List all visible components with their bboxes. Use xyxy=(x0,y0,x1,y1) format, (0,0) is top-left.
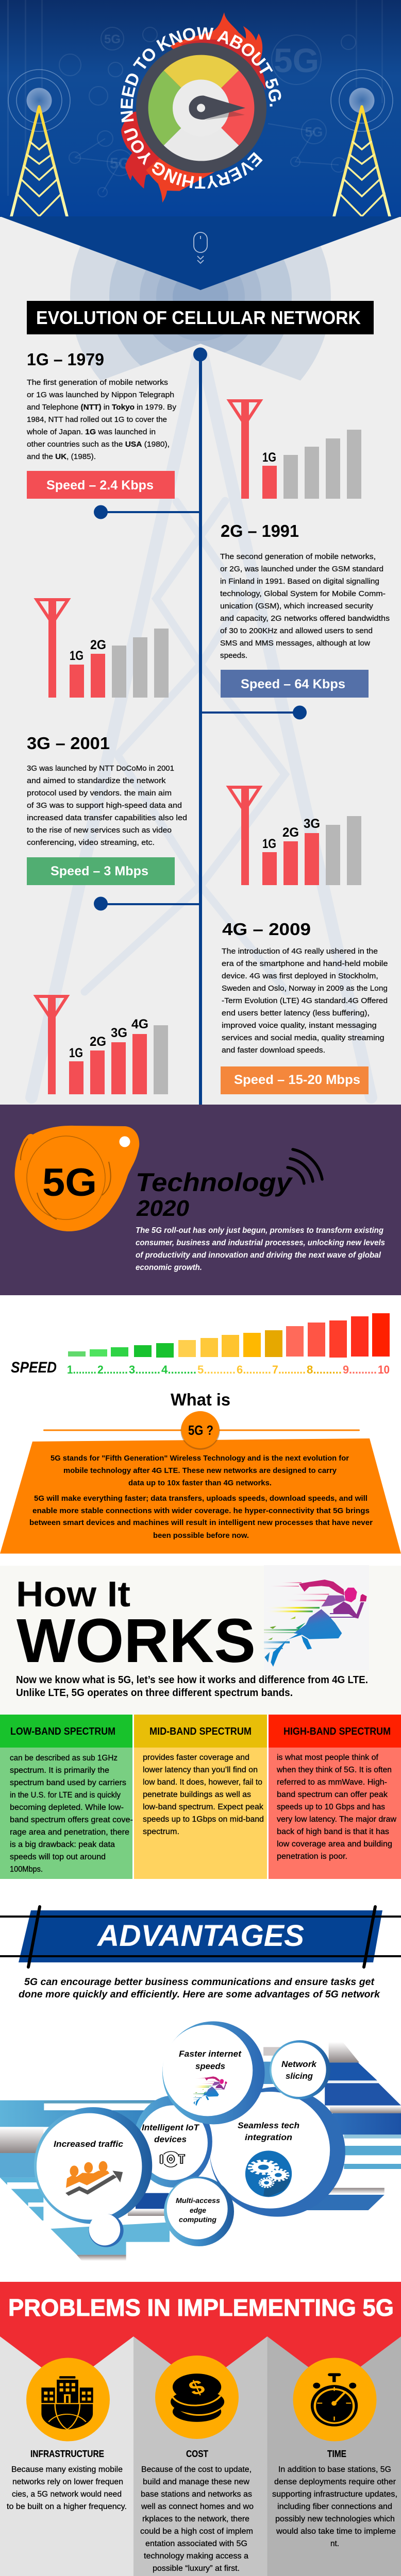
2G body text: speeds. xyxy=(220,651,247,660)
speed badge 2.4 Kbps: Speed – 2.4 Kbps xyxy=(46,478,154,493)
left tower xyxy=(11,107,67,216)
4G body text xyxy=(222,947,388,1055)
heading: PROBLEMS IN IMPLEMENTING 5G xyxy=(8,2294,394,2321)
chart: 3G signal bars xyxy=(229,786,361,885)
left signal rings xyxy=(8,70,70,131)
faint 5G marks: 5G xyxy=(305,124,323,140)
3G body text: to the rise of new services such as video xyxy=(27,826,172,835)
3G body text xyxy=(27,764,187,847)
bubble: seamless tech integration xyxy=(210,2087,345,2217)
red segment xyxy=(201,71,254,145)
chevron xyxy=(0,216,401,290)
column: cost: build and manage these new xyxy=(143,2478,250,2486)
bubble: increased traffic xyxy=(34,2107,152,2224)
column: high-band spectrum: speeds up to 10 Gbps and has xyxy=(277,1803,385,1811)
heading 4G: 4G – 2009 xyxy=(222,920,311,939)
icon: signal arcs xyxy=(288,1149,322,1183)
4G body text: services and social media, quality streaming xyxy=(222,1033,385,1042)
column: low-band spectrum: spectrum. It is primarily the xyxy=(10,1766,109,1775)
bubble labels: Seamless tech xyxy=(238,2121,299,2130)
column backgrounds xyxy=(0,2336,401,2576)
panel: 3G 2001 xyxy=(27,734,361,911)
hero panel xyxy=(0,0,401,290)
column: high-band spectrum: band spectrum can offer peak xyxy=(277,1790,388,1799)
column: mid-band spectrum xyxy=(134,1715,267,1879)
chart: 4G signal bars xyxy=(36,995,168,1094)
column: infrastructure: networks rely on lower frequen xyxy=(12,2478,123,2486)
body text: between smart devices and machines will result in intelligent new processes that have never xyxy=(29,1518,373,1527)
column: low-band spectrum: band spectrum offers great cove- xyxy=(10,1816,133,1824)
scale numbers xyxy=(67,1363,390,1376)
column: mid-band spectrum: speeds up to 1Gbps on mid-band xyxy=(143,1815,264,1824)
body text: 5G stands for "Fifth Generation" Wireless Technology and is the next evolution for xyxy=(51,1454,349,1463)
paragraph: The 5G roll-out has only just begun, promises to transform existing xyxy=(136,1226,384,1235)
illustration: running figure xyxy=(264,1565,369,1670)
chart: speed bars xyxy=(68,1313,390,1358)
circle badge 5G ?: 5G ? xyxy=(188,1422,213,1438)
3G body text: increased data transfer capabilities also led xyxy=(27,814,187,822)
white lower segment xyxy=(164,108,239,161)
column: low-band spectrum: can be described as sub 1GHz xyxy=(10,1754,118,1762)
icons xyxy=(41,2373,358,2429)
chart: 3G signal bars: 1G xyxy=(262,837,276,851)
column: infrastructure: to be built on a higher frequency. xyxy=(7,2502,127,2511)
speed badge 64 Kbps xyxy=(221,670,369,698)
column: cost: possible “luxury” at first. xyxy=(153,2564,240,2573)
evolution section background xyxy=(0,216,401,1105)
scale numbers: 9......... xyxy=(343,1363,377,1376)
column: cost: COST xyxy=(186,2449,208,2459)
hero background xyxy=(0,0,401,217)
1G body text xyxy=(26,378,177,461)
column: mid-band spectrum: penetrate buildings as well as xyxy=(143,1790,251,1799)
title curved around gauge: EVERYTHING YOU NEED TO KNOW ABOUT 5G. xyxy=(121,27,281,189)
1G body text: The first generation of mobile networks xyxy=(27,378,168,387)
circle badge 5G ? xyxy=(180,1411,220,1450)
background ribbons xyxy=(0,2042,401,2261)
bubble labels: Faster internet xyxy=(179,2049,242,2059)
5G orange badge xyxy=(14,1126,139,1231)
intro text: Unlike LTE, 5G operates on three different spectrum bands. xyxy=(16,1687,293,1699)
column: high-band spectrum: low coverage area and building xyxy=(277,1840,392,1849)
bubble labels: Increased traffic xyxy=(54,2140,123,2149)
3G body text: of 3G was to support high-speed data and xyxy=(27,801,182,810)
4G body text: end users better latency (less buffering), xyxy=(222,1009,370,1018)
column: time: possibly new technologies which xyxy=(275,2515,395,2523)
2G body text: SMS and MMS messages, although at low xyxy=(220,639,370,648)
chart: 2G signal bars: 1G xyxy=(70,649,83,663)
yellow segment xyxy=(164,55,239,108)
panel: 1G 1979 xyxy=(26,350,361,519)
body text xyxy=(29,1454,373,1540)
column: low-band spectrum: speeds will top out around xyxy=(10,1853,106,1861)
needle xyxy=(189,96,245,120)
4G body text: device. 4G was first deployed in Stockholm, xyxy=(222,972,378,980)
panel: 5G technology 2020 xyxy=(0,1105,401,1295)
column: cost: could be a high cost of implem xyxy=(140,2527,253,2536)
scale numbers: 6......... xyxy=(237,1363,271,1376)
needle shadow xyxy=(205,111,245,120)
section background xyxy=(0,1566,401,1715)
column: time: including fiber connections and xyxy=(277,2502,392,2511)
column: mid-band spectrum: low band. It does, however, fail to xyxy=(143,1778,262,1787)
needle pivot xyxy=(197,104,205,112)
chart: 2G signal bars: 2G xyxy=(90,638,106,652)
2G body text: in Finland in 1991. Based on digital signalling xyxy=(220,577,379,586)
4G body text: The introduction of 4G really ushered in the xyxy=(222,947,378,956)
chart: 1G signal bars xyxy=(229,399,361,499)
icon: people and rising arrow xyxy=(66,2161,123,2194)
panel: how it works xyxy=(0,1565,401,1715)
bubble labels xyxy=(54,2049,317,2224)
chart: 1G signal bars: 1G xyxy=(262,450,276,465)
column: infrastructure: cies, a 5G network would need xyxy=(12,2490,122,2499)
gauge outer ring xyxy=(136,43,266,173)
faint 5G marks: 5G xyxy=(274,41,319,79)
column: mid-band spectrum: MID-BAND SPECTRUM xyxy=(149,1726,252,1737)
2G body text xyxy=(220,552,390,660)
column: high-band spectrum: penetration is poor. xyxy=(277,1852,347,1861)
4G body text: era of the smartphone and hand-held mobile xyxy=(222,959,388,968)
scale numbers: 1........ xyxy=(67,1363,96,1376)
advantages intro text: done more quickly and efficiently. Here are some advantages of 5G network xyxy=(19,1989,380,2000)
bubble labels: Network xyxy=(281,2060,317,2069)
scale numbers: 4......... xyxy=(161,1363,196,1376)
icon: infrastructure xyxy=(41,2376,93,2429)
label SPEED: SPEED xyxy=(11,1359,57,1376)
column: low-band spectrum: is a big drawback: peak data xyxy=(10,1840,115,1849)
right tower xyxy=(334,107,390,216)
column: mid-band spectrum: spectrum. xyxy=(143,1827,179,1836)
heading How It: How It xyxy=(16,1574,130,1614)
right signal rings xyxy=(331,70,393,131)
signal fan behind chevron xyxy=(70,246,331,380)
column: cost: rkplaces to the network, there xyxy=(142,2515,249,2523)
5G orange badge: 5G xyxy=(42,1161,97,1205)
paragraph: consumer, business and industrial processes, unlocking new levels xyxy=(136,1239,385,1247)
heading 3G: 3G – 2001 xyxy=(27,734,110,753)
4G body text: and faster download speeds. xyxy=(222,1046,325,1055)
1G body text: and the UK, (1985). xyxy=(27,452,96,461)
panel: 2G 1991 xyxy=(37,521,390,719)
column: infrastructure: Because many existing mobile xyxy=(11,2465,123,2474)
banner: advantages xyxy=(0,1907,401,1967)
column: low-band spectrum: rage area and penetration, there xyxy=(10,1828,129,1837)
icon: gears xyxy=(245,2150,292,2197)
timeline line xyxy=(193,347,207,1105)
1G body text: and Telephone (NTT) in Tokyo in 1979. By xyxy=(27,403,177,412)
chart: 3G signal bars: 2G xyxy=(282,825,299,840)
bubble: network slicing xyxy=(270,2040,330,2099)
bubble: multi-access edge computing xyxy=(164,2177,234,2246)
2G body text: and capacity, 2G networks offered bandwidths xyxy=(220,614,390,623)
column: mid-band spectrum: provides faster coverage and xyxy=(143,1753,249,1762)
3G body text: and aimed to standardize the network xyxy=(27,776,166,785)
bubble labels: computing xyxy=(179,2215,216,2224)
bubble labels: integration xyxy=(245,2133,292,2142)
heading: evolution of cellular network: EVOLUTION OF CELLULAR NETWORK xyxy=(36,307,361,328)
small blank bubble xyxy=(89,2213,124,2247)
chart: 4G signal bars: 3G xyxy=(111,1026,127,1040)
3G body text: protocol used by vendors. the main aim xyxy=(27,789,172,798)
icon circle backgrounds xyxy=(26,2355,376,2441)
speedometer gauge xyxy=(136,43,266,173)
1G body text: other countries such as the USA (1980), xyxy=(27,440,170,449)
speed badge 15-20 Mbps xyxy=(221,1066,369,1094)
chart: 2G signal bars xyxy=(37,598,169,698)
chart: 3G signal bars: 3G xyxy=(304,817,320,831)
column: cost: base stations and networks as xyxy=(141,2490,252,2499)
column: mid-band spectrum: low-band spectrum. Expect peak xyxy=(143,1803,263,1811)
column: low-band spectrum: LOW-BAND SPECTRUM xyxy=(10,1726,115,1737)
speed badge 3 Mbps xyxy=(27,857,175,885)
body text: been possible before now. xyxy=(153,1531,249,1540)
heading What is: What is xyxy=(171,1390,230,1409)
connector dot xyxy=(94,896,199,911)
connector dot xyxy=(202,706,307,719)
column: infrastructure: INFRASTRUCTURE xyxy=(30,2449,104,2459)
1G body text: or 1G was launched by Nippon Telegraph xyxy=(27,391,174,399)
body text: 5G will make everything faster; data transfers, uploads speeds, download speeds, and will xyxy=(34,1494,367,1503)
red header with chevrons xyxy=(0,2282,401,2386)
chart: 4G signal bars: 4G xyxy=(131,1017,148,1031)
column: time: In addition to base stations, 5G xyxy=(278,2465,391,2474)
column: low-band spectrum: spectrum band used by carriers xyxy=(10,1778,126,1787)
column: high-band spectrum: referred to as mmWave. High- xyxy=(277,1778,387,1787)
heading 2G: 2G – 1991 xyxy=(221,521,299,540)
gauge hub xyxy=(173,79,229,136)
intro text: Now we know what is 5G, let’s see how it works and difference from 4G LTE. xyxy=(16,1674,368,1686)
diagram: advantages bubbles xyxy=(0,2021,401,2261)
banner: advantages: ADVANTAGES xyxy=(96,1919,304,1953)
bubble labels: slicing xyxy=(286,2072,313,2081)
body text: enable more stable connections with wider coverage. he hyper-connectivity that 5G brings xyxy=(32,1506,370,1515)
column: cost: Because of the cost to update, xyxy=(141,2465,252,2474)
2G body text: or 2G, was launched under the GSM standard xyxy=(220,565,383,573)
speed badge 15-20 Mbps: Speed – 15-20 Mbps xyxy=(234,1073,360,1087)
4G body text: -Term Evolution (LTE) 4G standard.4G Offered xyxy=(222,996,388,1005)
chart: 4G signal bars: 1G xyxy=(69,1046,83,1060)
column: cost xyxy=(140,2449,254,2573)
green segment xyxy=(148,71,201,145)
column: mid-band spectrum: lower latency than you’ll find on xyxy=(143,1766,258,1774)
scale numbers: 7......... xyxy=(272,1363,306,1376)
column: cost: technology making access a xyxy=(144,2552,248,2561)
panel: problems in implementing 5G xyxy=(0,2282,401,2576)
column: time: nt. xyxy=(330,2539,339,2548)
icon: cost coins: $ xyxy=(185,2376,209,2400)
3G body text: conferencing, video streaming, etc. xyxy=(27,838,155,847)
heading: evolution of cellular network xyxy=(27,301,374,334)
heading WORKS: WORKS xyxy=(16,1605,256,1675)
faint 5G marks xyxy=(104,32,323,172)
bubble: intelligent IoT devices xyxy=(133,2095,212,2188)
paragraph: of productivity and innovation and driving the next wave of global xyxy=(136,1251,381,1260)
connector dot xyxy=(94,505,199,519)
orange trapezoid xyxy=(0,1438,401,1554)
heading 2020: 2020 xyxy=(136,1196,190,1221)
speed scale xyxy=(11,1313,390,1376)
orange rule xyxy=(43,1429,360,1431)
icon: IoT xyxy=(160,2151,185,2167)
4G body text: improved voice quality, instant messaging xyxy=(222,1021,377,1030)
column: time: TIME xyxy=(327,2449,346,2459)
column: cost: entation associated with 5G xyxy=(145,2539,247,2548)
large faint tower behind timeline xyxy=(31,355,371,1097)
3G body text: 3G was launched by NTT DoCoMo in 2001 xyxy=(27,764,174,773)
2G body text: of 30 to 200KHz and allowed users to send xyxy=(220,626,373,635)
advantages intro text xyxy=(19,1976,380,2000)
column: high-band spectrum: is what most people think of xyxy=(277,1753,379,1762)
intro text xyxy=(16,1674,368,1699)
column: time: would also take time to impleme xyxy=(276,2527,396,2536)
faint 5G marks: 5G xyxy=(110,155,130,172)
paragraph xyxy=(136,1226,385,1272)
advantages intro text: 5G can encourage better business communications and ensure tasks get xyxy=(24,1976,375,1988)
bubble labels: Intelligent IoT xyxy=(142,2123,200,2132)
scale numbers: 5.......... xyxy=(197,1363,236,1376)
bubble labels: edge xyxy=(190,2206,206,2214)
column: cost: well as connect homes and wo xyxy=(141,2502,254,2511)
heading 1G: 1G – 1979 xyxy=(27,350,104,369)
column: low-band spectrum: becoming depleted. While low- xyxy=(10,1803,124,1812)
2G body text: unication (GSM), which increased security xyxy=(220,602,374,611)
icon: mouse scroll xyxy=(194,232,207,263)
column: low-band spectrum: in the U.S. for LTE and is quickly xyxy=(10,1791,121,1800)
flames xyxy=(121,12,265,202)
2G body text: The second generation of mobile networks, xyxy=(220,552,376,561)
decorative network icons xyxy=(7,0,383,197)
scale numbers: 8......... xyxy=(307,1363,342,1376)
scale numbers: 2........ xyxy=(97,1363,128,1376)
column: high-band spectrum: back of high band is that it has xyxy=(277,1827,389,1836)
column: time xyxy=(272,2449,397,2548)
chart: 4G signal bars: 2G xyxy=(90,1035,106,1049)
scale numbers: 3........ xyxy=(129,1363,160,1376)
column: high-band spectrum: very low latency. The major draw xyxy=(277,1815,397,1824)
column: high-band spectrum: HIGH-BAND SPECTRUM xyxy=(283,1726,391,1737)
paragraph: economic growth. xyxy=(136,1263,202,1272)
panel: 4G 2009 xyxy=(36,920,388,1094)
column: time: dense deployments require other xyxy=(274,2478,396,2486)
1G body text: whole of Japan. 1G was launched in xyxy=(26,428,156,436)
column: low-band spectrum xyxy=(0,1715,133,1879)
column: low-band spectrum: 100Mbps. xyxy=(10,1865,43,1874)
speed badge 64 Kbps: Speed – 64 Kbps xyxy=(241,677,345,691)
bubble labels: devices xyxy=(154,2135,187,2144)
4G body text: Sweden and Oslo, Norway in 2009 as the Long xyxy=(222,984,388,993)
band background xyxy=(0,1105,401,1295)
speed badge 2.4 Kbps xyxy=(27,471,175,499)
bubble: faster internet speeds xyxy=(162,2021,265,2124)
column: time: supporting infrastructure updates, xyxy=(272,2490,397,2499)
column: high-band spectrum xyxy=(269,1715,401,1879)
body text: mobile technology after 4G LTE. These new networks are designed to carry xyxy=(63,1466,337,1475)
bubble labels: speeds xyxy=(195,2062,225,2071)
heading Technology: Technology xyxy=(136,1168,293,1197)
speed badge 3 Mbps: Speed – 3 Mbps xyxy=(51,864,148,878)
icon: cost coins xyxy=(171,2374,224,2422)
column: infrastructure xyxy=(7,2449,127,2511)
panel: what is 5G xyxy=(0,1390,401,1554)
bubble labels: Multi-access xyxy=(176,2196,220,2205)
1G body text: 1984, NTT had rolled out 1G to cover the xyxy=(27,415,167,424)
2G body text: technology, Global System for Mobile Comm- xyxy=(220,589,386,598)
faint 5G marks: 5G xyxy=(104,32,121,46)
icon: time stopwatch xyxy=(311,2373,358,2427)
icon: small runner xyxy=(193,2076,227,2106)
scale numbers: 10 xyxy=(378,1363,390,1376)
body text: data up to 10x faster than 4G networks. xyxy=(128,1479,272,1487)
column: high-band spectrum: when they think of 5G. It is often xyxy=(276,1766,392,1774)
